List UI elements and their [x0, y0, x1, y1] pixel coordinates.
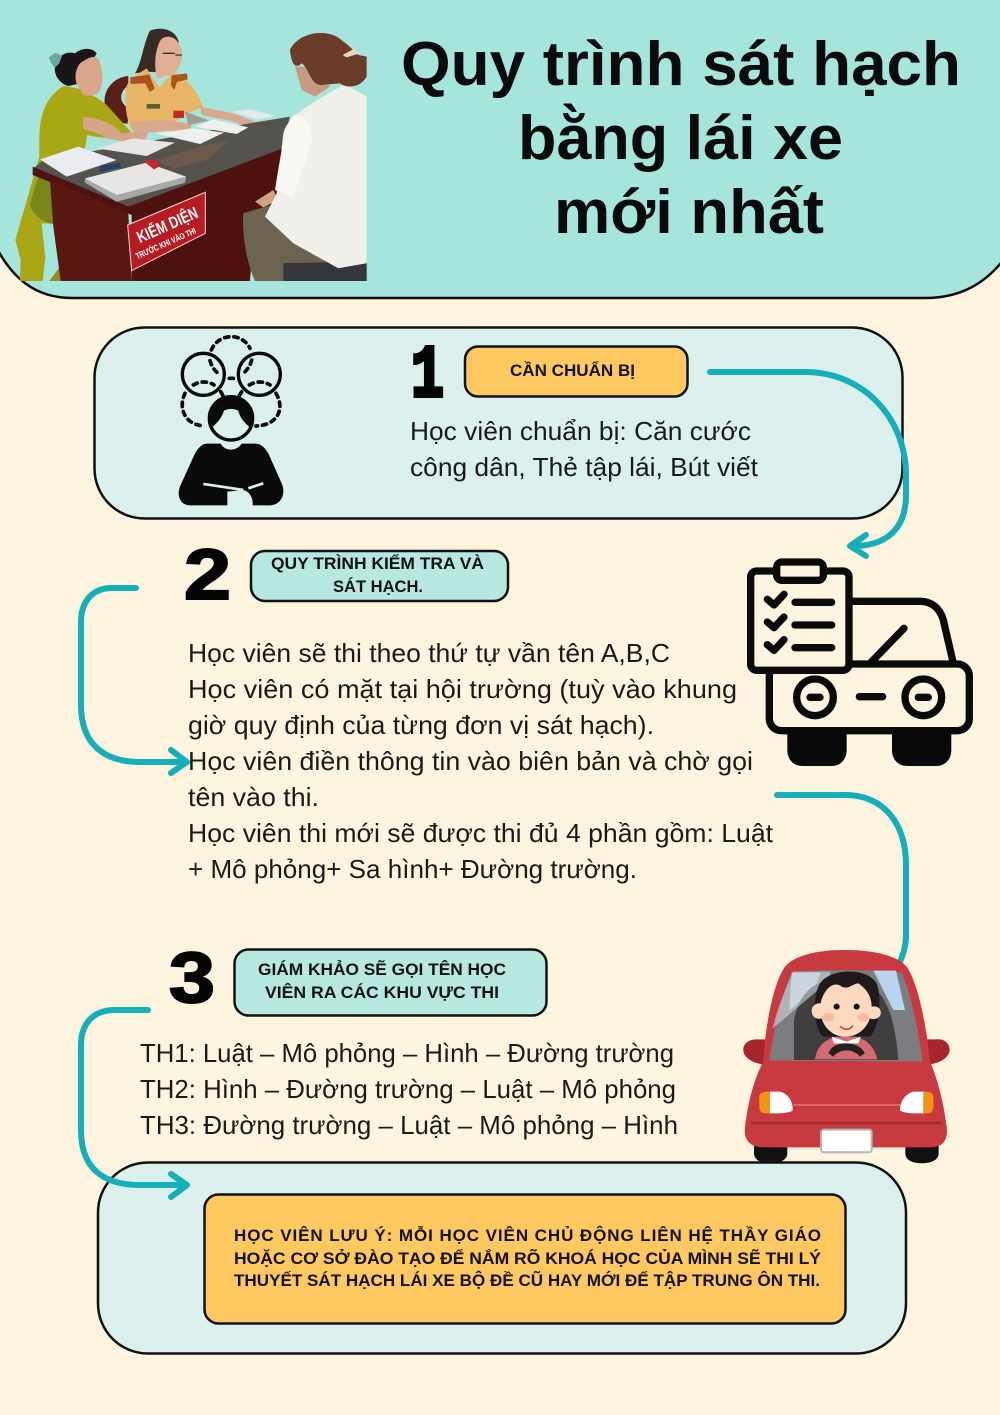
torso with crossed arms — [179, 444, 283, 505]
headlights — [759, 1092, 933, 1113]
icon: car with checklist — [751, 562, 969, 766]
step 2 text: Học viên có mặt tại hội trường (tuỳ vào khung — [188, 674, 737, 704]
arrow: step 1 to step 2 — [710, 372, 906, 556]
wheels — [754, 1145, 939, 1163]
mirrors — [743, 1039, 950, 1065]
license plate — [821, 1130, 872, 1152]
step 1 heading pill — [465, 346, 688, 396]
panel: note background — [98, 1162, 906, 1354]
seat — [794, 978, 898, 1060]
chair — [105, 76, 130, 124]
title: Quy trình sát hạch — [401, 30, 961, 99]
arrow: step 3 to note — [81, 1010, 187, 1197]
title — [401, 30, 961, 247]
step 2 text — [188, 638, 774, 884]
step 1 text — [410, 416, 759, 482]
step 3 text: TH1: Luật – Mô phỏng – Hình – Đường trường — [140, 1038, 674, 1068]
clip — [777, 562, 823, 580]
step 2 heading pill — [251, 551, 508, 601]
step 3 heading pill — [234, 950, 546, 1016]
step 2 text: Học viên điền thông tin vào biên bản và chờ gọi — [188, 746, 753, 776]
head with hair — [209, 396, 253, 440]
step 3 text: TH2: Hình – Đường trường – Luật – Mô phỏng — [140, 1074, 676, 1104]
header band — [0, 0, 1000, 298]
title: mới nhất — [554, 178, 824, 247]
step 3 heading pill: GIÁM KHẢO SẼ GỌI TÊN HỌC — [258, 959, 506, 979]
step 2 heading pill: SÁT HẠCH. — [333, 577, 423, 596]
step 1 text: Học viên chuẩn bị: Căn cước — [410, 416, 751, 446]
officer in uniform — [125, 29, 257, 138]
wheels — [787, 730, 951, 766]
windshield — [769, 970, 923, 1062]
car body — [769, 664, 969, 731]
callout: note box: THUYẾT SÁT HẠCH LÁI XE BỘ ĐỀ CŨ HAY MỚI ĐỂ TẬP TRUNG ÔN THI. — [234, 1270, 820, 1290]
arrow: into step 2 text — [81, 588, 187, 773]
step 3 text — [140, 1038, 678, 1140]
sign: KIEM DIEN: TRƯỚC KHI VÀO THI — [134, 225, 198, 261]
sign: KIEM DIEN — [128, 192, 205, 271]
icon: person thinking with glasses — [179, 337, 283, 505]
candidate seen from behind — [243, 33, 367, 281]
sign: KIEM DIEN: KIỂM DIỆN — [134, 203, 201, 247]
arrow: step 2 to step 3 — [777, 795, 906, 962]
photo: exam check desk — [15, 29, 367, 281]
callout: note box — [204, 1194, 846, 1324]
desk — [33, 117, 290, 281]
step 2 text: tên vào thi. — [188, 782, 319, 812]
step 1 text: công dân, Thẻ tập lái, Bút viết — [410, 452, 759, 482]
checklist rows — [767, 594, 832, 650]
car body — [745, 950, 947, 1147]
thought dashes — [182, 337, 280, 426]
step 2 heading pill: QUY TRÌNH KIỂM TRA VÀ — [271, 554, 484, 573]
step 3 number: 3 — [169, 939, 215, 1018]
papers on desk — [40, 109, 275, 202]
step 3 heading pill: VIÊN RA CÁC KHU VỰC THI — [265, 983, 499, 1002]
headlights — [797, 679, 942, 716]
step 2 text: + Mô phỏng+ Sa hình+ Đường trường. — [188, 854, 637, 884]
step 3 text: TH3: Đường trường – Luật – Mô phỏng – Hình — [140, 1110, 678, 1140]
step 1 heading pill: CẦN CHUẨN BỊ — [510, 361, 635, 380]
roof and wiper — [850, 601, 953, 663]
driver — [812, 971, 881, 1059]
callout: note box: HỌC VIÊN LƯU Ý: MỖI HỌC VIÊN CHỦ ĐỘNG LIÊN HỆ THẦY GIÁO — [234, 1226, 821, 1245]
step 2 text: giờ quy định của từng đơn vị sát hạch). — [188, 710, 654, 740]
title: bằng lái xe — [518, 104, 843, 173]
step 2 text: Học viên sẽ thi theo thứ tự vần tên A,B,C — [188, 638, 670, 668]
callout: note box: HOẶC CƠ SỞ ĐÀO TẠO ĐỂ NẮM RÕ KHOÁ HỌC CỦA MÌNH SẼ THI LÝ — [234, 1248, 822, 1268]
step 1 number: 1 — [411, 335, 444, 419]
icon: red car with woman driver — [743, 950, 950, 1163]
clipboard — [751, 571, 849, 670]
woman in green ao dai — [15, 49, 148, 281]
glasses rings — [182, 353, 224, 395]
step 2 number: 2 — [184, 536, 231, 615]
panel: step 1 background — [94, 328, 902, 518]
step 2 text: Học viên thi mới sẽ được thi đủ 4 phần gồm: Luật — [188, 818, 774, 848]
